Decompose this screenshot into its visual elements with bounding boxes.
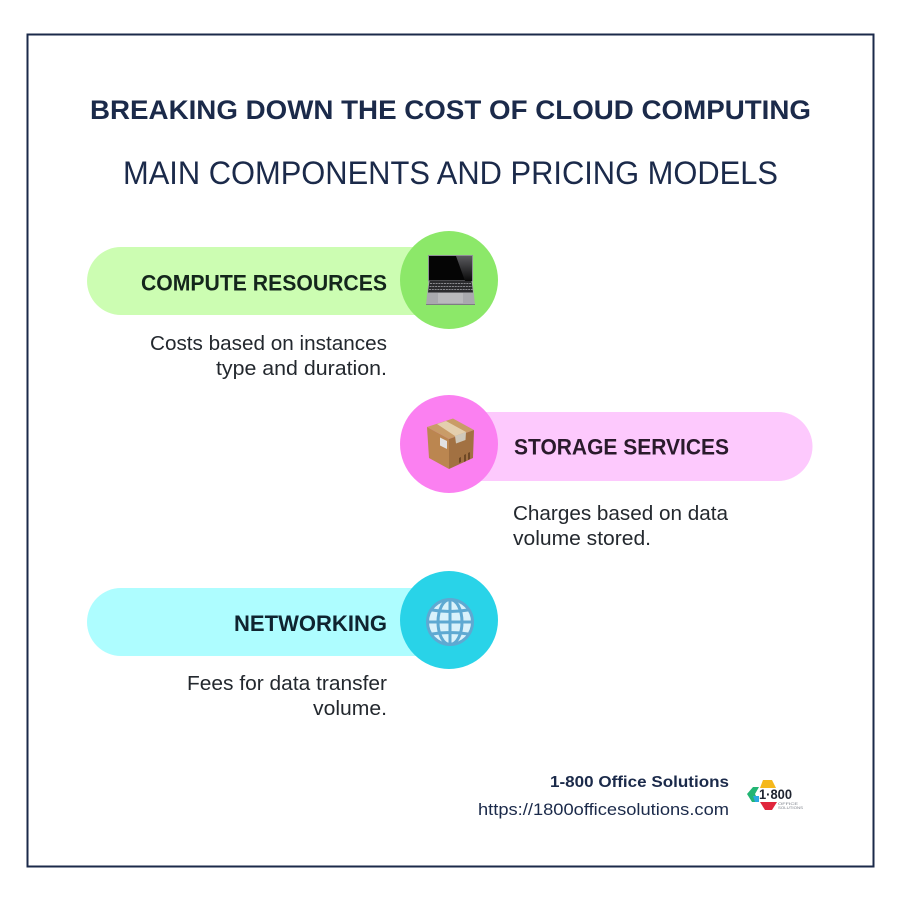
circle: compute [400, 231, 498, 329]
circle: storage [400, 395, 498, 493]
icon: laptop [426, 256, 475, 305]
logo: 1-800: SOLUTIONS [778, 805, 803, 810]
subtitle: MAIN COMPONENTS AND PRICING MODELS [123, 155, 778, 191]
description: networking: volume. [313, 698, 387, 720]
footer: website url: https://1800officesolutions.com [478, 800, 729, 819]
footer: company name: 1-800 Office Solutions [550, 774, 729, 791]
icon: package box [427, 418, 474, 469]
label: compute resources: COMPUTE RESOURCES [141, 270, 387, 296]
logo: 1-800: OFFICE [778, 801, 798, 806]
panel: networking [87, 571, 498, 720]
pill: storage [440, 412, 813, 481]
panel: storage services [400, 395, 813, 550]
description: networking [187, 673, 387, 720]
description: storage services: Charges based on data [513, 503, 729, 525]
icon: globe [427, 599, 473, 645]
description: networking: Fees for data transfer [187, 673, 387, 695]
description: storage services: volume stored. [513, 528, 651, 550]
label: storage services: STORAGE SERVICES [514, 434, 729, 460]
logo: 1-800 [747, 780, 803, 810]
description: compute resources [150, 333, 387, 380]
label: networking: NETWORKING [234, 611, 387, 636]
title: BREAKING DOWN THE COST OF CLOUD COMPUTING [90, 95, 811, 125]
logo: 1-800: 1·800 [759, 786, 792, 802]
pill: networking [87, 588, 440, 656]
description: compute resources: type and duration. [216, 358, 387, 380]
panel: compute resources [87, 231, 498, 380]
pill: compute [87, 247, 440, 315]
description: compute resources: Costs based on instances [150, 333, 387, 355]
description: storage services [513, 503, 729, 550]
circle: networking [400, 571, 498, 669]
